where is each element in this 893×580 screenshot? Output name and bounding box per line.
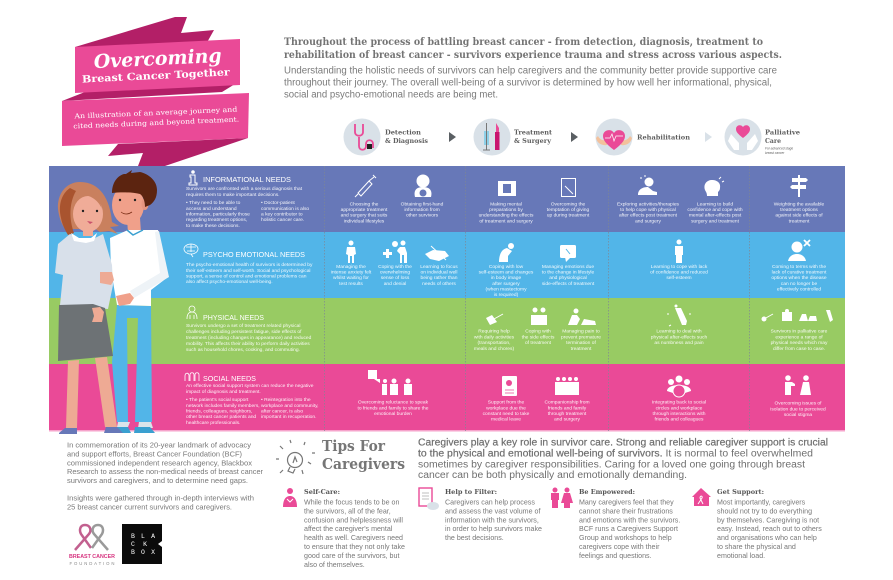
need item: lack of curative treatment (772, 270, 827, 276)
description: healthcare professionals. (186, 420, 240, 426)
stage label: Detection & Diagnosis: & Diagnosis (385, 137, 428, 145)
need item: constant need to take (483, 411, 530, 417)
need item: understanding the effects (479, 212, 534, 218)
stage label: Palliative Care (765, 128, 801, 155)
need item (547, 202, 590, 218)
icon: person with information (415, 174, 431, 197)
tip: self-care: the survivors, all of the fear, (304, 507, 391, 515)
stage label: Palliative Care: breast cancer (765, 151, 785, 155)
panel: coloured need bands (49, 166, 845, 432)
description (186, 383, 319, 426)
need item: and surgery that suits (341, 212, 388, 218)
need item (650, 264, 708, 281)
intro text (284, 66, 777, 100)
need item: termination of (566, 340, 596, 346)
about text: and support efforts, Breast Cancer Foundation (BCF) (67, 449, 242, 458)
description: • They need to be able to (186, 200, 241, 206)
need item: treatment (571, 346, 592, 352)
tip: self-care: to ensure that they not only take (304, 543, 405, 551)
need item (479, 264, 534, 298)
journey stages (344, 118, 801, 156)
about text: Research to assess the non-medical needs of breast cancer (67, 467, 264, 476)
heading: SOCIAL NEEDS (203, 374, 256, 383)
need item: Learning to focus (420, 264, 458, 270)
tip: self-care: While the focus tends to be on (304, 498, 399, 506)
caregiver introduction: sometimes by caregiver responsibilities. Caring for a loved one going through breast (418, 459, 805, 470)
need item (522, 328, 555, 346)
need item: isolation due to perceived (770, 406, 826, 412)
tip: get support: emotional load. (717, 552, 765, 560)
need item (774, 202, 825, 224)
heading: Tips For Caregivers: Caregivers (322, 456, 405, 473)
need item: information from (404, 207, 440, 213)
need item (651, 328, 708, 346)
description (186, 186, 309, 229)
tip: help to filter: Caregivers can help process (445, 498, 535, 506)
icon: two people seated (785, 375, 811, 395)
need item: Support from the (488, 400, 524, 406)
need item: Coping with (525, 328, 551, 334)
logo: Breast Cancer Foundation (69, 525, 115, 566)
description: also affect psycho-emotional well-being. (186, 279, 273, 285)
need item: physical after-effects such (651, 334, 708, 340)
need item: intense anxiety felt (331, 270, 372, 276)
icons: palliative physical (762, 309, 833, 322)
arrow (571, 132, 578, 142)
need item: Managing the (336, 264, 366, 270)
logo: Blackbox: BOX (131, 549, 155, 556)
icon: clipboard (502, 376, 517, 396)
tip: self-care: Self-Care: (304, 488, 340, 496)
need item: Coming to terms with the (772, 264, 826, 270)
need item: with daily activities (474, 334, 515, 340)
description: requires them to make important decisions. (186, 192, 280, 198)
intro text: social and psycho-emotional needs are being met. (284, 90, 498, 100)
icon: social (185, 373, 199, 381)
need item: Learning to build (697, 202, 733, 208)
need item (341, 202, 388, 224)
icon: caregiver (283, 488, 297, 507)
need item: Obtaining first-hand (401, 202, 444, 208)
description: The psycho-emotional health of survivors is determined by (186, 262, 313, 268)
need item (483, 400, 530, 422)
tip: get support: Most importantly, caregivers (717, 498, 806, 506)
description: • Doctor-patient (261, 200, 295, 206)
need item: emotional burden (374, 411, 412, 417)
need item: Learning to cope with lack (651, 264, 708, 270)
need item: through treatment (548, 411, 587, 417)
tip: be empowered: and emotions with the survivors. (579, 516, 680, 524)
need item: needs of others (422, 281, 456, 287)
icon: information (189, 170, 197, 185)
need item: after surgery (492, 281, 520, 287)
description: access and understand (186, 206, 237, 212)
caregiver introduction: to the physical and emotional well-being of survivors. It is normal to feel overwhelmed (418, 448, 813, 460)
need item: of treatment (525, 340, 552, 346)
icon: doctor with cross (788, 240, 810, 261)
description: important in recuperation. (261, 414, 316, 420)
tip: get support (692, 488, 822, 560)
need item: meals and chores) (474, 346, 514, 352)
need item: Overcoming the (551, 202, 586, 208)
need item: self-esteem and changes (479, 270, 534, 276)
tip: get support: by themselves. Caregiving is not (717, 516, 819, 524)
ribbon description: An illustration of an average journey and (73, 106, 238, 120)
tip: be empowered: Group and workshops to help (579, 534, 672, 542)
tip: self-care: good care of the survivors, but (304, 552, 399, 560)
need item (544, 400, 590, 422)
logo: Breast Cancer Foundation: FOUNDATION (70, 561, 114, 566)
tip: help to filter: Help to Filter: (445, 488, 497, 496)
icon: syringe (355, 175, 376, 197)
need item (358, 400, 429, 417)
subtitle: Breast Cancer Together: Breast Cancer Together (82, 67, 231, 86)
about text: commissioned independent research agency, Blackbox (67, 458, 252, 467)
need item: Learning to deal with (656, 328, 702, 334)
tip: be empowered: cannot share their frustrations (579, 507, 673, 515)
description: after cancer, is also (261, 408, 303, 414)
need item: (when mastectomy (485, 286, 527, 292)
heading: Tips For Caregivers (322, 438, 405, 473)
need item: Managing emotions due (542, 264, 594, 270)
panel: informational needs (186, 170, 825, 229)
icon: managing pain (568, 308, 596, 325)
man (110, 170, 169, 433)
intro heading: Throughout the process of battling breast cancer - from detection, diagnosis, treatment to (284, 36, 763, 48)
icon: presentation (498, 181, 516, 196)
icon: foot (667, 304, 691, 326)
need item: friends and family (548, 406, 587, 412)
description: communication is also (261, 206, 309, 212)
description (186, 323, 312, 353)
need item: workplace due the (486, 406, 526, 412)
description: challenges including persistent fatigue, side effects of (186, 329, 302, 335)
need item (378, 264, 412, 287)
title: Overcoming: Overcoming (93, 45, 222, 73)
icon: speech screen (560, 245, 576, 262)
need item: and physiological (549, 275, 587, 281)
icon: hand crossed (425, 246, 449, 261)
need item (474, 328, 515, 352)
need item (331, 264, 372, 287)
title ribbon (62, 17, 249, 166)
tip: get support: and organisations who can help (717, 534, 817, 542)
need item: confidence and cope with (687, 207, 743, 213)
tip: self-care: health as well. Caregivers need (304, 534, 403, 542)
heading: Tips For Caregivers: Tips For (322, 438, 385, 455)
caregiver introduction: cancer can be both physically and emotionally demanding. (418, 470, 687, 481)
description: network includes family members, (186, 403, 260, 409)
need item (617, 202, 680, 224)
need item: up during treatment (547, 212, 590, 218)
description: An effective social support system can reduce the negative (186, 383, 314, 389)
woman (55, 182, 123, 434)
need item: of treatment and surgery (479, 218, 533, 224)
need item: Integrating back to social (652, 400, 706, 406)
tip: self-care: confusion and helplessness will (304, 516, 403, 524)
logo: Blackbox: CK (131, 541, 147, 548)
need item: whilst waiting for (333, 275, 369, 281)
tip: be empowered: Many caregivers feel that they (579, 498, 674, 506)
description: mobility. This affects their ability to perform daily activities (186, 341, 310, 347)
need item: preparations by (489, 207, 523, 213)
icon: side effects (531, 308, 547, 325)
tip: help to filter: in order to help survivors make (445, 525, 542, 533)
need item: after effects post treatment (619, 212, 678, 218)
need item: Managing pain to (562, 328, 600, 334)
need item (652, 400, 706, 422)
heading: INFORMATIONAL NEEDS (203, 175, 291, 184)
icon: house with ribbon (692, 488, 711, 506)
need item: friends and colleagues (655, 416, 704, 422)
need item: sense of loss (381, 275, 410, 281)
icon: stethoscope (344, 118, 380, 156)
tip: get support: easy. Instead, reach out to others (717, 525, 822, 533)
description: regarding treatment options, (186, 217, 247, 223)
about text: 25 breast cancer current survivors and caregivers. (67, 502, 232, 511)
need item: to help cope with physical (620, 207, 676, 213)
need item: Choosing the (350, 202, 379, 208)
need item: overwhelming (380, 270, 410, 276)
arrow (705, 132, 712, 142)
need item: through interactions with (652, 411, 706, 417)
logo: Breast Cancer Foundation: BREAST CANCER (69, 554, 115, 560)
icon: group of friends (555, 377, 579, 395)
stage label: Detection & Diagnosis: Detection (385, 128, 421, 136)
icon: head (704, 177, 724, 196)
about text: survivors and caregivers, and to determine need gaps. (67, 476, 248, 485)
need item: physical needs which may (771, 340, 828, 346)
need item: in body image (491, 275, 522, 281)
need item: options when the disease (771, 275, 827, 281)
intro text: Understanding the holistic needs of survivors can help caregivers and the community better provide supportive care (284, 66, 777, 76)
need item: other survivors (406, 212, 439, 218)
need item: Weighting the available (774, 202, 825, 208)
description: treatment (including changes in appearance) and reduced (186, 335, 312, 341)
caregiver introduction: Caregivers play a key role in survivor care. Strong and reliable caregiver support is crucial (418, 438, 828, 448)
description: support, a sense of control and emotional problems can (186, 274, 307, 280)
need item (770, 400, 826, 418)
panel: social needs (185, 370, 826, 426)
description: a key contributor to (261, 212, 303, 218)
tip: get support: should not try to do everything (717, 507, 812, 515)
icon: clipboard and bubble (419, 488, 439, 510)
stage label: Detection & Diagnosis (385, 128, 428, 145)
need item: and denial (384, 281, 406, 287)
need item: test results (339, 281, 363, 287)
need item (401, 202, 444, 218)
need item: side-effects of treatment (542, 281, 595, 287)
icon: anxious person (346, 240, 356, 263)
need item: Exploring activities/therapies (617, 202, 680, 208)
need item (771, 328, 828, 352)
icon: physical (187, 306, 197, 319)
need item: medical leave (491, 416, 521, 422)
need item: Overcoming reluctance to speak (358, 400, 429, 406)
need item: Survivors in palliative care (771, 328, 828, 334)
tip: be empowered (551, 488, 680, 560)
need item: temptation of giving (547, 207, 589, 213)
description: impact of diagnosis and treatment. (186, 389, 261, 395)
need item: Coping with the (378, 264, 412, 270)
need item: to the change in lifestyle (542, 270, 595, 276)
need item: individual lifestyles (344, 218, 385, 224)
tip: help to filter: information with the survivors, (445, 516, 539, 524)
intro heading: rehabilitation of breast cancer - survivors experience trauma and stress across various aspects. (284, 49, 782, 61)
description: workplace and community, (261, 403, 319, 409)
need item: differ from case to case. (773, 346, 825, 352)
need item: Coping with low (489, 264, 524, 270)
tip: self-care: also of themselves. (304, 561, 365, 569)
tip: help to filter: the best decisions. (445, 534, 504, 542)
logo: Blackbox (122, 524, 162, 564)
description: • Reintegration into the (261, 397, 311, 403)
icon: light bulb (276, 440, 315, 474)
tip: help to filter (419, 488, 542, 542)
need item: mental after-effects post (689, 212, 742, 218)
description: such as household chores, cooking, and commuting. (186, 347, 300, 353)
tip: be empowered: caregivers cope with their (579, 543, 660, 551)
need item: Requiring help (478, 328, 510, 334)
description: Survivors undergo a set of treatment related physical (186, 323, 300, 329)
need item: circles and workplace (656, 406, 703, 412)
need item (561, 328, 601, 352)
need item: social stigma (784, 412, 812, 418)
need item: Overcoming issues of (774, 400, 822, 406)
icon: syringe and scalpel (474, 118, 510, 156)
intro text: throughout their journey. The overall well-being of a survivor is determined by how well her informational, physical, (284, 78, 772, 88)
icon: heart with arms (596, 118, 632, 156)
description: other breast cancer patients and (186, 414, 256, 420)
need item: being rather than (421, 275, 458, 281)
stage label: Palliative Care: Care (765, 137, 782, 145)
icon: coping with loss (383, 240, 407, 263)
stage label: Palliative Care: Palliative (765, 128, 801, 136)
need item: treatment options (780, 207, 818, 213)
description: • The patient's social support (186, 397, 249, 403)
icon: broom (486, 314, 503, 325)
icon: brain (184, 244, 198, 257)
description: to make these decisions. (186, 223, 240, 229)
about text: In commemoration of its 20-year landmark of advocacy (67, 440, 251, 450)
need item (420, 264, 458, 287)
icon: heart in hands (724, 118, 762, 156)
stage label: Palliative Care: For advanced stage (765, 146, 793, 150)
icon: exploring therapies (638, 176, 657, 195)
need item: and surgery (554, 416, 580, 422)
need item (687, 202, 743, 224)
description: their self-esteem and self-worth. Social and psychological (186, 268, 311, 274)
illustration: couple (55, 170, 169, 434)
tip: self-care: affect the caregiver's mental (304, 525, 393, 533)
icon: speech bubble and people (368, 370, 412, 395)
tip: be empowered: BCF runs a Caregivers Support (579, 525, 678, 533)
need item: experience a range of (775, 334, 823, 340)
description: information, particularly those (186, 212, 250, 218)
need item: prevent premature (561, 334, 601, 340)
need item (542, 264, 595, 287)
arrow (449, 132, 456, 142)
tip: get support: Get Support: (717, 488, 764, 496)
stage label: Treatment & Surgery: Treatment (514, 128, 553, 136)
need item: self-esteem (666, 275, 692, 281)
need item (771, 264, 827, 292)
panel: physical needs (186, 304, 833, 353)
heading: PHYSICAL NEEDS (203, 313, 264, 322)
intro heading (284, 36, 782, 61)
tip: get support: to share the physical and (717, 543, 796, 551)
need item: against side effects of (775, 212, 823, 218)
need item: as numbness and pain (654, 340, 704, 346)
need item: (transportation, (478, 340, 510, 346)
about text (67, 440, 264, 511)
stage label: Treatment & Surgery: & Surgery (514, 137, 552, 145)
description: holistic cancer care. (261, 217, 304, 223)
ribbon description: cited needs during and beyond treatment. (73, 116, 239, 130)
stage label: Treatment & Surgery (514, 128, 553, 145)
need item: can no longer be (781, 281, 817, 287)
icon: tablet (562, 178, 576, 196)
ribbon description (73, 106, 239, 130)
need item: and surgery (635, 218, 661, 224)
need item: the side effects (522, 334, 555, 340)
icon: two people (551, 488, 573, 508)
need item: to friends and family to share the (358, 406, 429, 412)
need item: Making mental (490, 202, 522, 208)
need item: surgery and treatment (691, 218, 740, 224)
description (186, 262, 313, 285)
need item (479, 202, 534, 224)
panel: psycho emotional needs (184, 240, 827, 298)
need item: Companionship from (544, 400, 590, 406)
need item: of confidence and reduced (650, 270, 708, 276)
heading: PSYCHO EMOTIONAL NEEDS (203, 250, 305, 259)
tip: be empowered: feelings and questions. (579, 552, 652, 560)
need item: treatment (789, 218, 810, 224)
icon: sitting person (499, 243, 514, 262)
caregiver introduction (418, 438, 828, 481)
tip: help to filter: and assess the vast volume of (445, 507, 540, 515)
need item: effectively controlled (777, 286, 821, 292)
icon: people circle with heart (667, 376, 691, 397)
icon: signpost (790, 175, 808, 197)
need item: is required) (494, 292, 519, 298)
about text: Insights were gathered through in-depth interviews with (67, 494, 254, 502)
description: friends, colleagues, neighbors, (186, 408, 252, 414)
stage label: Rehabilitation: Rehabilitation (637, 134, 690, 142)
icon: standing person (675, 240, 683, 263)
tip: be empowered: Be Empowered: (579, 488, 635, 496)
need item: on individual well (421, 270, 457, 276)
tip: self-care (283, 488, 405, 569)
need item: appropriate treatment (341, 207, 388, 213)
description: Survivors are confronted with a serious diagnosis that (186, 186, 303, 192)
logo: Blackbox: BLA (131, 533, 155, 540)
